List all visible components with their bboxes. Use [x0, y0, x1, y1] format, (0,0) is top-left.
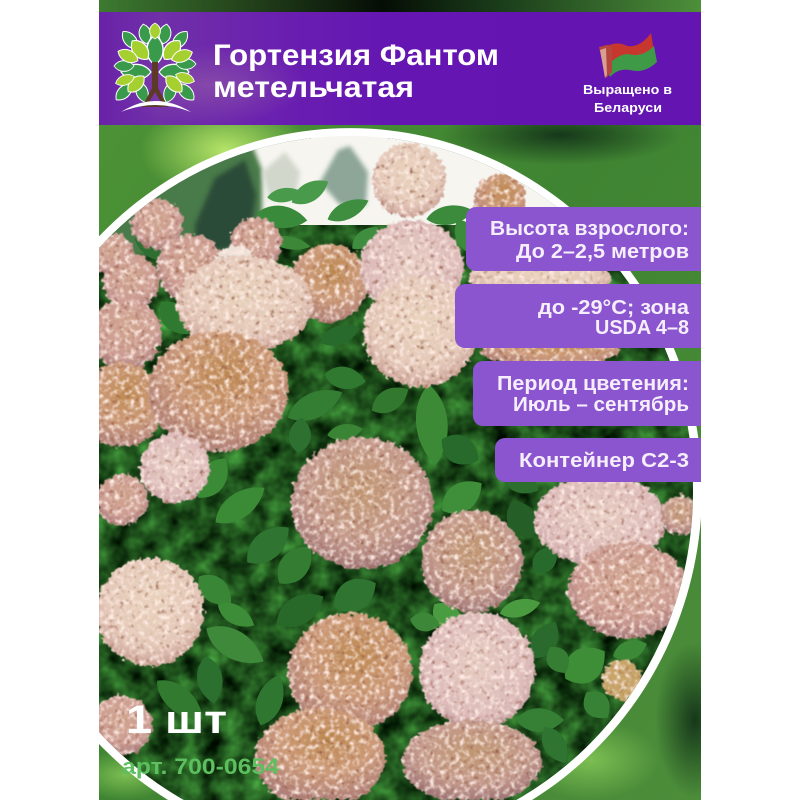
- callout: hardiness: до -29°C; зона: [538, 297, 690, 319]
- callout: height: До 2–2,5 метров: [516, 241, 689, 263]
- hydrangea blooms: [80, 143, 700, 800]
- callout: flowering period: [473, 361, 701, 426]
- white ring around photo: [99, 128, 701, 800]
- title: метельчатая: [213, 71, 414, 104]
- callout: height: Высота взрослого:: [490, 218, 689, 240]
- callout: flowering period: Период цветения:: [497, 373, 689, 395]
- icon: Belarus flag: [599, 33, 657, 78]
- callout: hardiness: USDA 4–8: [595, 317, 689, 339]
- header banner: [99, 12, 701, 125]
- label: grown in Belarus: Выращено в: [583, 82, 672, 97]
- callout: height: [466, 207, 701, 271]
- title: [213, 39, 499, 104]
- logo: tree with leaves: [112, 23, 198, 112]
- callout: hardiness: [455, 284, 701, 348]
- article number: арт. 700-0654: [122, 754, 280, 779]
- infographic canvas: [99, 0, 701, 800]
- sky and distant trees: [99, 130, 589, 255]
- title: Гортензия Фантом: [213, 39, 499, 72]
- foliage base: [99, 138, 701, 800]
- callout: container: [495, 438, 701, 482]
- label: grown in Belarus: [583, 82, 672, 115]
- callout: flowering period: Июль – сентябрь: [513, 394, 689, 416]
- top strip of dark foliage: [99, 0, 701, 13]
- hydrangea photo: [80, 130, 701, 800]
- quantity label: 1 шт: [126, 698, 227, 742]
- leaves: [130, 173, 650, 769]
- label: grown in Belarus: Беларуси: [594, 100, 662, 115]
- callout: container: Контейнер С2-3: [519, 450, 689, 472]
